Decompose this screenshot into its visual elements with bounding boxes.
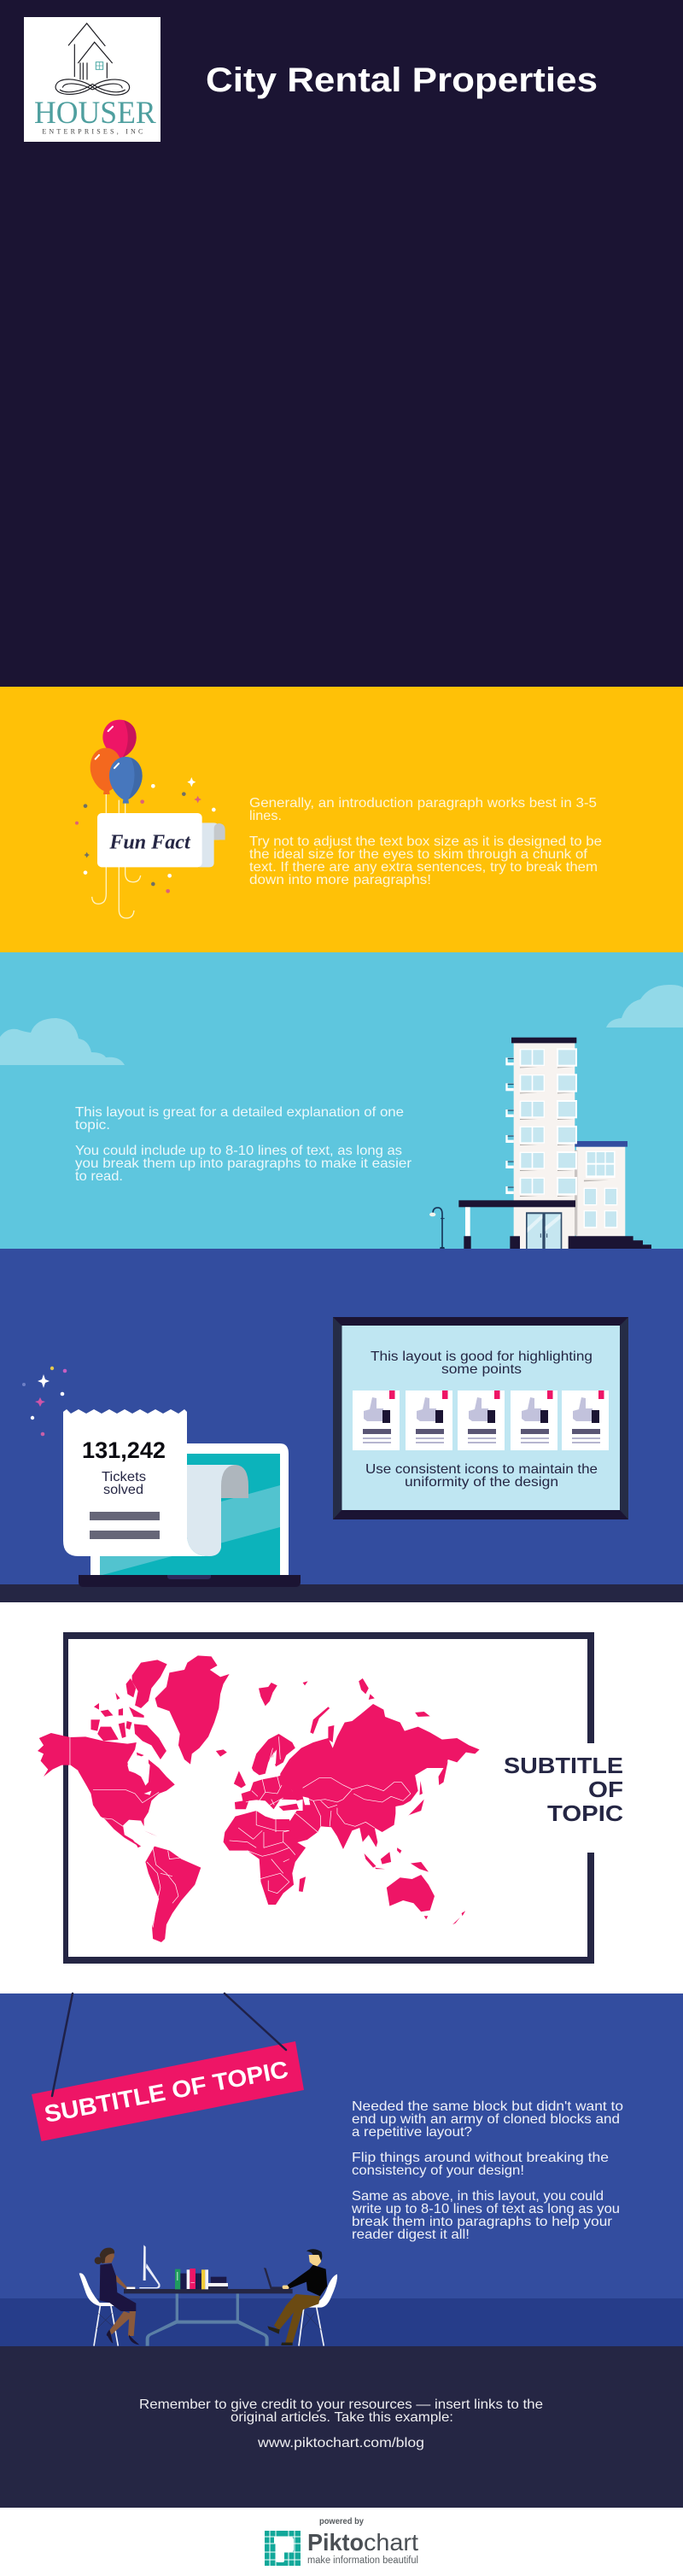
panel: footer credits: www.piktochart.com/blog	[257, 2436, 424, 2450]
text block: flip things around: Needed the same block but didn't want to	[352, 2099, 623, 2114]
sign: subtitle of topic	[32, 1993, 304, 2141]
icon: fun fact balloons banner: Fun Fact	[108, 830, 191, 853]
text: highlighting points: some points	[441, 1362, 522, 1377]
text block: layout explanation: topic.	[75, 1118, 110, 1133]
panel: introduction	[0, 687, 683, 952]
text block: introduction	[249, 796, 602, 887]
logo: Houser Enterprises: ENTERPRISES, INC	[42, 128, 143, 136]
icon cards: thumbs up	[353, 1390, 609, 1450]
subtitle	[504, 1753, 623, 1826]
text block: introduction: Generally, an introduction paragraph works best in 3-5	[249, 796, 597, 811]
text block: flip things around: Flip things around without breaking the	[352, 2151, 609, 2165]
text: consistent icons	[365, 1462, 598, 1490]
stat: tickets solved: solved	[103, 1483, 143, 1497]
text block: layout explanation	[75, 1105, 412, 1184]
text block: introduction: down into more paragraphs!	[249, 873, 431, 887]
icon: laptop	[79, 1443, 301, 1587]
text block: flip things around: a repetitive layout?	[352, 2125, 472, 2140]
panel: footer credits: original articles. Take this example:	[231, 2410, 453, 2425]
subtitle: SUBTITLE	[504, 1753, 623, 1778]
panel: header	[0, 0, 683, 687]
icon: right cloud	[606, 985, 683, 1027]
text block: introduction: lines.	[249, 809, 282, 823]
sign: subtitle of topic: SUBTITLE OF TOPIC	[42, 2056, 290, 2128]
text block: introduction: the ideal size for the eyes to skim through a chunk of	[249, 847, 588, 862]
text block: layout explanation: You could include up to 8-10 lines of text, as long as	[75, 1144, 402, 1158]
panel: powered by Piktochart: powered by	[319, 2516, 364, 2526]
subtitle: OF	[588, 1777, 623, 1802]
text block: introduction: Try not to adjust the text box size as it is designed to be	[249, 834, 602, 849]
icon: apartment building	[429, 1038, 651, 1250]
logo: Houser Enterprises: HOUSER	[34, 96, 156, 131]
panel: powered by Piktochart: Pikto	[307, 2529, 364, 2556]
text block: flip things around: consistency of your design!	[352, 2163, 524, 2178]
sparkles	[22, 1367, 67, 1436]
stat: tickets solved: Tickets	[102, 1470, 146, 1484]
subtitle: TOPIC	[547, 1800, 623, 1826]
text block: flip things around: reader digest it all!	[352, 2228, 470, 2242]
panel: detailed explanation	[0, 952, 683, 1250]
text block: flip things around: Same as above, in this layout, you could	[352, 2189, 604, 2204]
text: consistent icons: uniformity of the design	[405, 1475, 558, 1490]
text: consistent icons: Use consistent icons to maintain the	[365, 1462, 598, 1477]
icon: fun fact balloons banner	[75, 720, 225, 918]
icon: left cloud	[0, 1018, 125, 1065]
panel: powered by Piktochart: chart	[364, 2529, 418, 2556]
map frame	[63, 1632, 594, 1964]
panel: world map	[0, 1602, 683, 1993]
text block: introduction: text. If there are any extra sentences, try to break them	[249, 860, 598, 875]
panel: footer credits	[0, 2346, 683, 2508]
panel: footer credits: Remember to give credit to your resources — insert links to the	[139, 2397, 543, 2412]
receipt card	[63, 1409, 248, 1556]
text block: layout explanation: you break them up into paragraphs to make it easier	[75, 1156, 412, 1171]
title: City Rental Properties	[206, 61, 598, 99]
text block: flip things around: end up with an army of cloned blocks and	[352, 2112, 620, 2127]
panel: powered by Piktochart: make information beautiful	[307, 2556, 418, 2566]
panel: flip layout	[0, 1993, 683, 2346]
text block: flip things around: write up to 8-10 lines of text as long as you	[351, 2202, 620, 2216]
illustration: people at desk	[79, 2245, 337, 2346]
stat: tickets solved: 131,242	[82, 1437, 166, 1463]
logo: Houser Enterprises	[24, 17, 161, 142]
framed board	[333, 1317, 628, 1519]
panel: powered by Piktochart	[0, 2508, 683, 2576]
text block: layout explanation: to read.	[75, 1169, 123, 1184]
text: highlighting points: This layout is good for highlighting	[371, 1349, 593, 1364]
text block: flip things around: break them into paragraphs to help your	[352, 2215, 613, 2229]
stat: tickets solved	[82, 1437, 166, 1497]
text: highlighting points	[371, 1349, 593, 1377]
floor band	[0, 1584, 683, 1602]
text block: layout explanation: This layout is great for a detailed explanation of one	[75, 1105, 404, 1120]
icon: Piktochart mark	[265, 2531, 301, 2566]
text block: flip things around	[351, 2099, 623, 2242]
world map	[38, 1655, 480, 1942]
panel: highlights	[0, 1249, 683, 1602]
